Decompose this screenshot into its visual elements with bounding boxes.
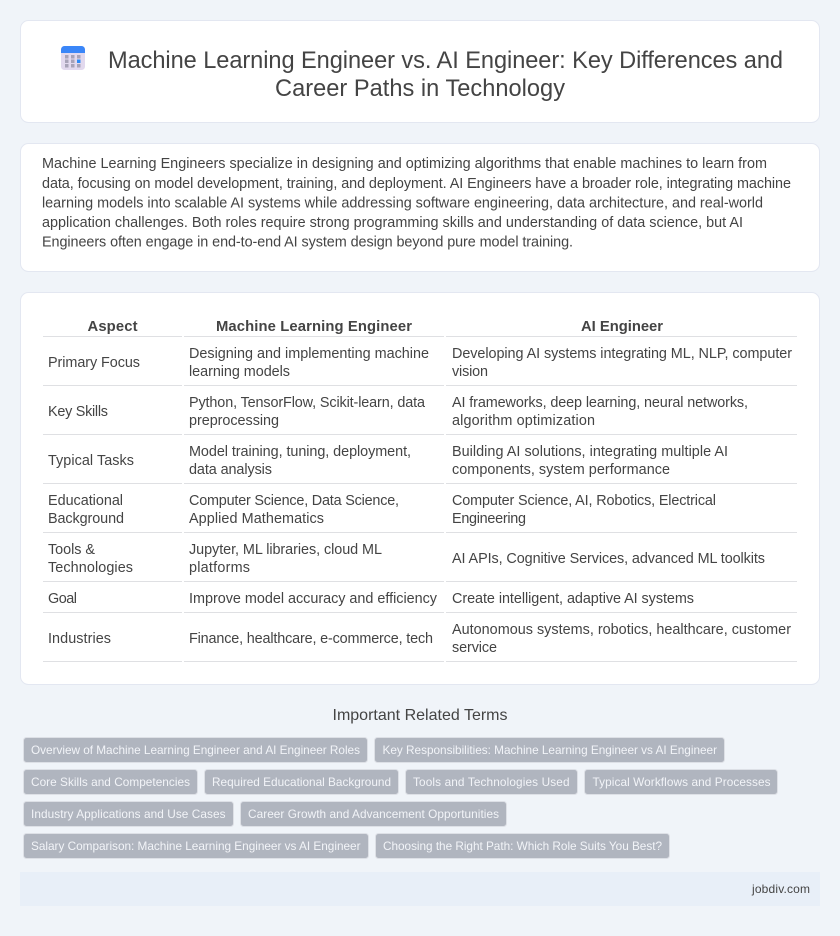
panel: introduction xyxy=(20,144,820,272)
table header xyxy=(88,319,663,335)
row: goal: Create intelligent, adaptive AI systems xyxy=(452,591,694,607)
heading: important related terms: Important Related Terms xyxy=(332,707,508,724)
row: key skills: AI frameworks, deep learning, neural networks, xyxy=(452,395,748,411)
row: educational background xyxy=(48,493,716,527)
table header: Machine Learning Engineer xyxy=(216,319,412,335)
row: educational background: Engineering xyxy=(452,511,526,527)
row: goal: Goal xyxy=(48,591,77,607)
row: typical tasks xyxy=(48,444,728,478)
row: primary focus xyxy=(48,346,792,380)
row: typical tasks: Typical Tasks xyxy=(48,453,134,469)
text block: introduction: learning models into scalable AI systems while addressing software engineering, data architecture, and real-world xyxy=(42,196,763,212)
icon: calendar xyxy=(61,46,85,70)
row: key skills: Python, TensorFlow, Scikit-learn, data xyxy=(189,395,425,411)
row: primary focus: learning models xyxy=(189,364,290,380)
row: tools and technologies xyxy=(48,542,765,576)
row: primary focus: Designing and implementing machine xyxy=(189,346,429,362)
row: industries: Industries xyxy=(48,631,111,647)
row: typical tasks: Building AI solutions, integrating multiple AI xyxy=(452,444,728,460)
text block: introduction: data, focusing on model development, training, and deployment. AI Engineers have a broader role, integrating machine xyxy=(42,176,791,192)
text block: introduction xyxy=(42,156,791,250)
tag group: related terms: Overview of Machine Learning Engineer and AI Engineer Roles xyxy=(31,743,360,757)
row: key skills xyxy=(48,395,748,429)
row: educational background: Computer Science, AI, Robotics, Electrical xyxy=(452,493,716,509)
row: goal xyxy=(48,591,694,607)
row: primary focus: Developing AI systems integrating ML, NLP, computer xyxy=(452,346,792,362)
tag group: related terms xyxy=(24,738,778,858)
tag group: related terms: Industry Applications and Use Cases xyxy=(31,807,226,821)
row: typical tasks: Model training, tuning, deployment, xyxy=(189,444,411,460)
row: educational background: Educational xyxy=(48,493,123,509)
text block: introduction: Engineers often engage in end-to-end AI system design beyond pure model training. xyxy=(42,234,573,250)
table header: AI Engineer xyxy=(581,319,663,335)
title xyxy=(108,48,783,102)
row: tools and technologies: AI APIs, Cognitive Services, advanced ML toolkits xyxy=(452,551,765,567)
row: goal: Improve model accuracy and efficiency xyxy=(189,591,438,607)
footer xyxy=(20,872,820,906)
row: typical tasks: data analysis xyxy=(189,462,272,478)
row: educational background: Applied Mathematics xyxy=(189,511,324,527)
row: tools and technologies: Technologies xyxy=(48,560,133,576)
title: Career Paths in Technology xyxy=(275,76,565,102)
row: key skills: preprocessing xyxy=(189,413,279,429)
tag group: related terms: Career Growth and Advancement Opportunities xyxy=(248,807,499,821)
row: typical tasks: components, system performance xyxy=(452,462,670,478)
tag group: related terms: Salary Comparison: Machine Learning Engineer vs AI Engineer xyxy=(31,839,361,853)
row: industries: Autonomous systems, robotics, healthcare, customer xyxy=(452,622,791,638)
row: industries: service xyxy=(452,640,497,656)
row: industries xyxy=(48,622,791,656)
row: tools and technologies: Tools & xyxy=(48,542,95,558)
row: industries: Finance, healthcare, e-commerce, tech xyxy=(189,631,433,647)
row: primary focus: vision xyxy=(452,364,488,380)
title: Machine Learning Engineer vs. AI Engineer: Key Differences and xyxy=(108,48,783,74)
tag group: related terms: Choosing the Right Path: Which Role Suits You Best? xyxy=(383,839,662,853)
tag group: related terms: Key Responsibilities: Machine Learning Engineer vs AI Engineer xyxy=(382,743,717,757)
row: key skills: algorithm optimization xyxy=(452,413,595,429)
tag group: related terms: Required Educational Background xyxy=(212,775,391,789)
tag group: related terms: Core Skills and Competencies xyxy=(31,775,190,789)
tag group: related terms: Tools and Technologies Used xyxy=(413,775,570,789)
row: tools and technologies: platforms xyxy=(189,560,250,576)
row: tools and technologies: Jupyter, ML libraries, cloud ML xyxy=(189,542,382,558)
row: educational background: Background xyxy=(48,511,124,527)
row: primary focus: Primary Focus xyxy=(48,355,140,371)
row: educational background: Computer Science, Data Science, xyxy=(189,493,399,509)
text block: introduction: Machine Learning Engineers specialize in designing and optimizing algorithms that enable machines to learn from xyxy=(42,156,767,172)
row: key skills: Key Skills xyxy=(48,404,108,420)
text block: introduction: application challenges. Both roles require strong programming skills and understanding of data science, but AI xyxy=(42,215,743,231)
tag group: related terms: Typical Workflows and Processes xyxy=(592,775,771,789)
panel: header xyxy=(20,20,820,122)
footer: jobdiv.com xyxy=(751,882,810,896)
panel: comparison table xyxy=(20,292,820,684)
table header: Aspect xyxy=(88,319,138,335)
